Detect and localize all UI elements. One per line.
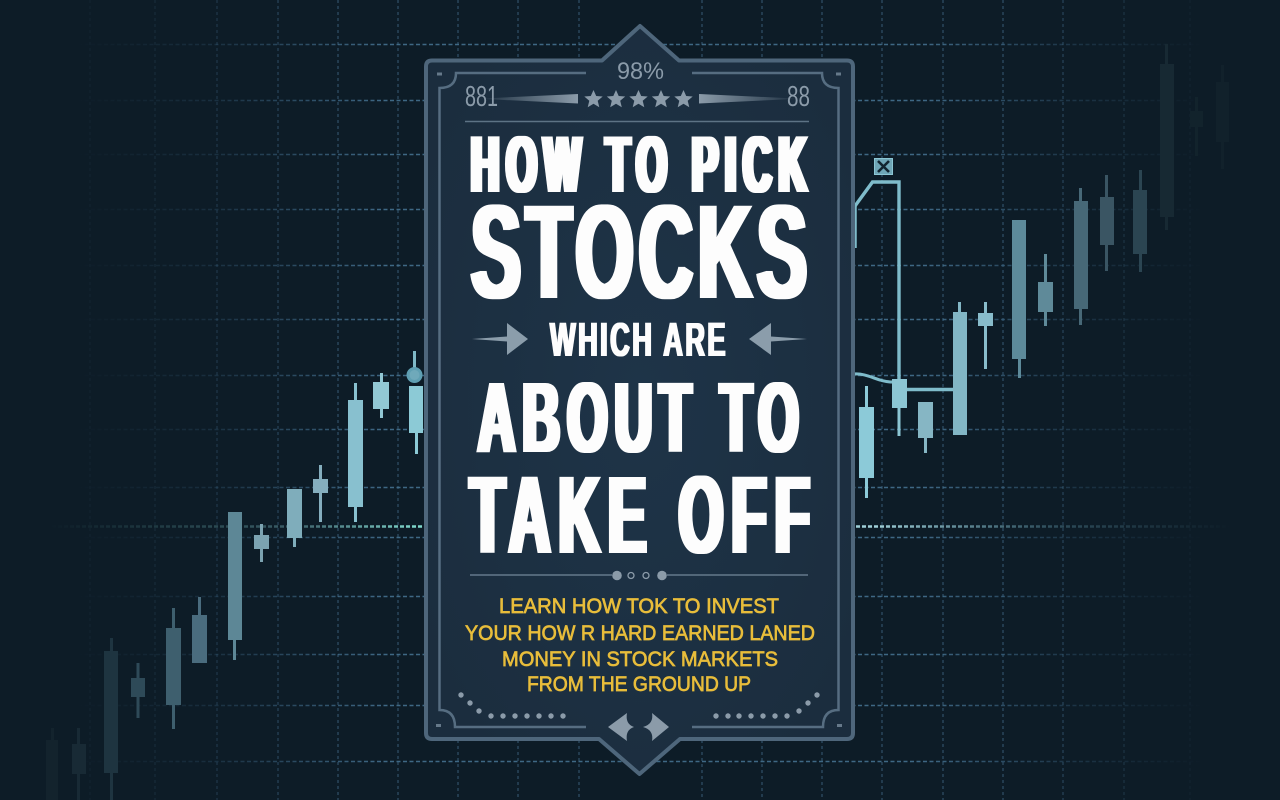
candle 11 (348, 383, 363, 522)
candle R7 (1038, 254, 1053, 326)
left wedge (478, 94, 578, 104)
subtitle text: LEARN HOW TOK TO INVEST (499, 595, 779, 618)
subtitle text (465, 595, 815, 696)
top label: left number: 881 (465, 81, 498, 113)
panel: title card (426, 26, 853, 774)
candle R12 (1190, 97, 1203, 156)
candle R10 (1133, 170, 1147, 272)
subtitle text: MONEY IN STOCK MARKETS (502, 648, 778, 671)
candle R11 (1160, 44, 1174, 230)
candle 5 (166, 608, 181, 729)
candle R4 (953, 302, 967, 435)
heading: about to: ABOUT TO (478, 362, 806, 474)
bottom dot ornaments (458, 692, 820, 719)
candle 12 (373, 373, 389, 418)
top label: percent: 98% (617, 58, 664, 85)
candle 2 (72, 728, 86, 800)
right wedge (699, 94, 800, 104)
panel frame (426, 26, 853, 774)
candle R13 (1216, 65, 1229, 169)
candle R5 (978, 302, 993, 369)
arrow: left pointing right (472, 323, 528, 355)
subtitle text: YOUR HOW R HARD EARNED LANED (465, 622, 815, 645)
candle R1 (859, 386, 874, 498)
candle 7 (228, 512, 242, 660)
inner frame ornament (440, 73, 838, 727)
panel: title card: HOW TO PICK (471, 120, 814, 210)
arrow: right pointing left (749, 323, 807, 355)
breakout line (854, 182, 955, 390)
candle 9 (287, 489, 302, 547)
heading: which are: WHICH ARE (550, 314, 728, 367)
subtitle text: FROM THE GROUND UP (527, 673, 751, 696)
candle R6 (1012, 220, 1026, 378)
five stars (584, 90, 693, 107)
candle R8 (1074, 188, 1088, 325)
candle R9 (1100, 175, 1114, 271)
corner marks (436, 72, 842, 727)
candlestick chart: left rising series (46, 351, 423, 800)
candle 6 (192, 597, 207, 663)
candlestick chart: right rising series (854, 44, 1229, 498)
heading: take off: TAKE OFF (470, 454, 818, 577)
heading: stocks: STOCKS (471, 178, 812, 327)
top label: right number: 88 (787, 81, 810, 113)
candle 4 (131, 663, 145, 718)
bottom diamond ornament (608, 713, 669, 741)
candle 1 (46, 728, 58, 800)
candle 3 (104, 638, 118, 800)
candle 10 (313, 465, 328, 522)
icon: crossed box marker (874, 158, 892, 174)
candle 8 (254, 524, 269, 562)
candle 13 with round marker (406, 351, 423, 454)
dotted divider (470, 571, 808, 580)
candle R3 (918, 402, 933, 453)
candle R2 (892, 379, 907, 436)
star rating row (478, 90, 800, 107)
